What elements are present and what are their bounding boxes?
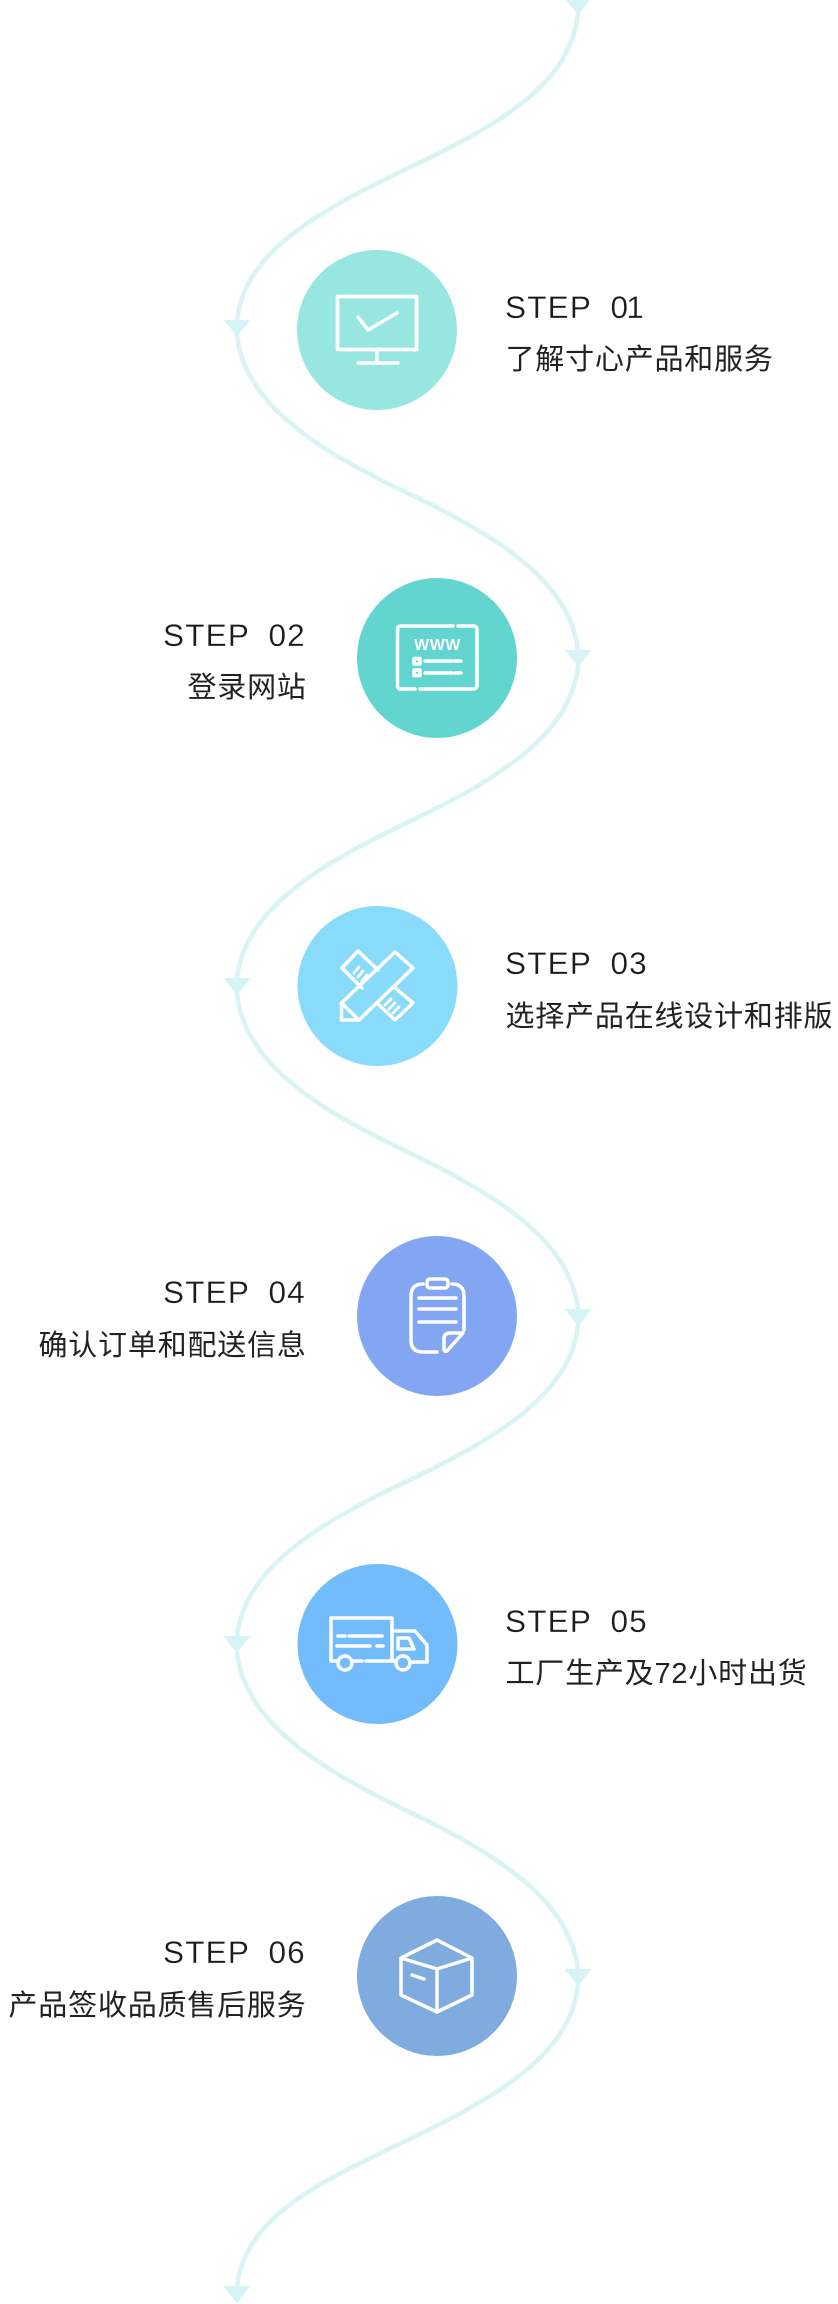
icon: website [398,626,477,689]
step 06 heading: STEP 06 [163,1934,306,1970]
step 03 description: 选择产品在线设计和排版 [506,1000,833,1033]
step 03 heading: STEP 03 [505,945,648,981]
step 04 heading: STEP 04 [163,1274,306,1310]
step 02 heading: STEP 02 [163,617,306,653]
circle 02 [357,578,517,738]
www label: WWW [414,637,461,654]
icon: monitor with check [338,296,416,363]
circle 04 [357,1236,517,1396]
connector curves [237,12,578,2288]
winding connector path with arrows [224,0,592,2303]
step 05 description: 工厂生产及72小时出货 [506,1657,808,1690]
step 05 heading: STEP 05 [505,1603,648,1639]
icon: clipboard [411,1279,464,1352]
circle 01 [297,250,457,410]
step 01 [297,250,774,410]
circle 06 [357,1896,517,2056]
icon: pencil and ruler [342,951,413,1020]
website list [414,658,461,676]
circle 05 [298,1564,458,1724]
step 01 description: 了解寸心产品和服务 [506,343,774,376]
icon: delivery truck [331,1618,427,1670]
circle 03 [298,906,458,1066]
website frame [398,626,477,689]
step 01 heading: STEP 01 [505,289,645,325]
step 06 description: 产品签收品质售后服务 [8,1989,307,2022]
step 04 description: 确认订单和配送信息 [38,1329,307,1362]
step 05 [298,1564,808,1724]
icon: box [401,1940,472,2012]
arrowheads [224,0,592,2303]
step 02 description: 登录网站 [188,671,307,704]
step 06 [8,1896,517,2056]
step 04 [38,1236,517,1396]
step 03 [298,906,833,1066]
step 02 [163,578,517,738]
